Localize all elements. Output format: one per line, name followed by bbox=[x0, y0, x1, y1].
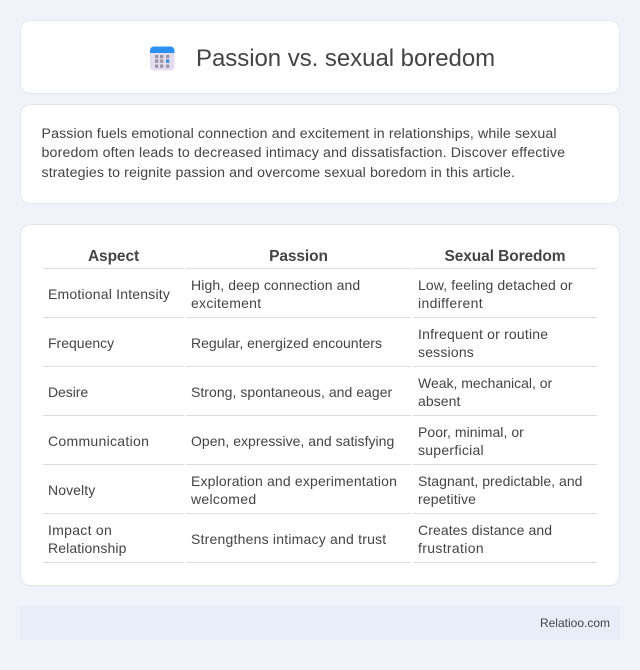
text: repetitive bbox=[418, 491, 476, 507]
text: Regular, energized encounters bbox=[191, 335, 382, 351]
text: Impact on bbox=[48, 522, 112, 538]
text: indifferent bbox=[418, 295, 483, 311]
text: Strong, spontaneous, and eager bbox=[191, 384, 392, 400]
text: Weak, mechanical, or bbox=[418, 375, 552, 391]
text: sessions bbox=[418, 344, 474, 360]
footer credit: Relatioo.com bbox=[540, 616, 610, 630]
text: excitement bbox=[191, 295, 261, 311]
panel: intro text: strategies to reignite passion and overcome sexual boredom in this article. bbox=[42, 165, 515, 181]
text: Low, feeling detached or bbox=[418, 277, 573, 293]
text: absent bbox=[418, 393, 460, 409]
row: Emotional Intensity bbox=[48, 277, 573, 311]
text: Relationship bbox=[48, 540, 126, 556]
footer bar bbox=[20, 606, 620, 640]
row: Desire bbox=[48, 375, 552, 409]
text: Strengthens intimacy and trust bbox=[191, 531, 386, 547]
row: Frequency bbox=[48, 326, 548, 360]
panel: comparison table bbox=[20, 224, 620, 586]
panel: intro text: Passion fuels emotional connection and excitement in relationships, while sexual bbox=[42, 126, 557, 142]
text: High, deep connection and bbox=[191, 277, 360, 293]
panel: title card bbox=[20, 20, 620, 94]
text: Creates distance and bbox=[418, 522, 552, 538]
text: Infrequent or routine bbox=[418, 326, 548, 342]
text: Exploration and experimentation bbox=[191, 473, 397, 489]
text: Novelty bbox=[48, 482, 95, 498]
text: Stagnant, predictable, and bbox=[418, 473, 582, 489]
text: Poor, minimal, or bbox=[418, 424, 524, 440]
text: frustration bbox=[418, 540, 484, 556]
panel: intro text bbox=[20, 104, 620, 204]
icon: calendar bbox=[150, 46, 174, 70]
table header: Passion: Passion bbox=[269, 248, 328, 265]
text: Communication bbox=[48, 433, 149, 449]
text: Open, expressive, and satisfying bbox=[191, 433, 394, 449]
text: Frequency bbox=[48, 335, 114, 351]
text: superficial bbox=[418, 442, 484, 458]
row: Impact on Relationship bbox=[48, 522, 552, 556]
table header: Sexual Boredom: Sexual Boredom bbox=[445, 248, 565, 265]
text: Desire bbox=[48, 384, 88, 400]
row: Communication bbox=[48, 424, 524, 458]
row: Novelty bbox=[48, 473, 582, 507]
text: Emotional Intensity bbox=[48, 286, 170, 302]
text: welcomed bbox=[191, 491, 256, 507]
panel: intro text: boredom often leads to decreased intimacy and dissatisfaction. Discover effective bbox=[42, 145, 565, 161]
title: Passion vs. sexual boredom bbox=[196, 45, 495, 72]
table header: Aspect: Aspect bbox=[88, 248, 139, 265]
